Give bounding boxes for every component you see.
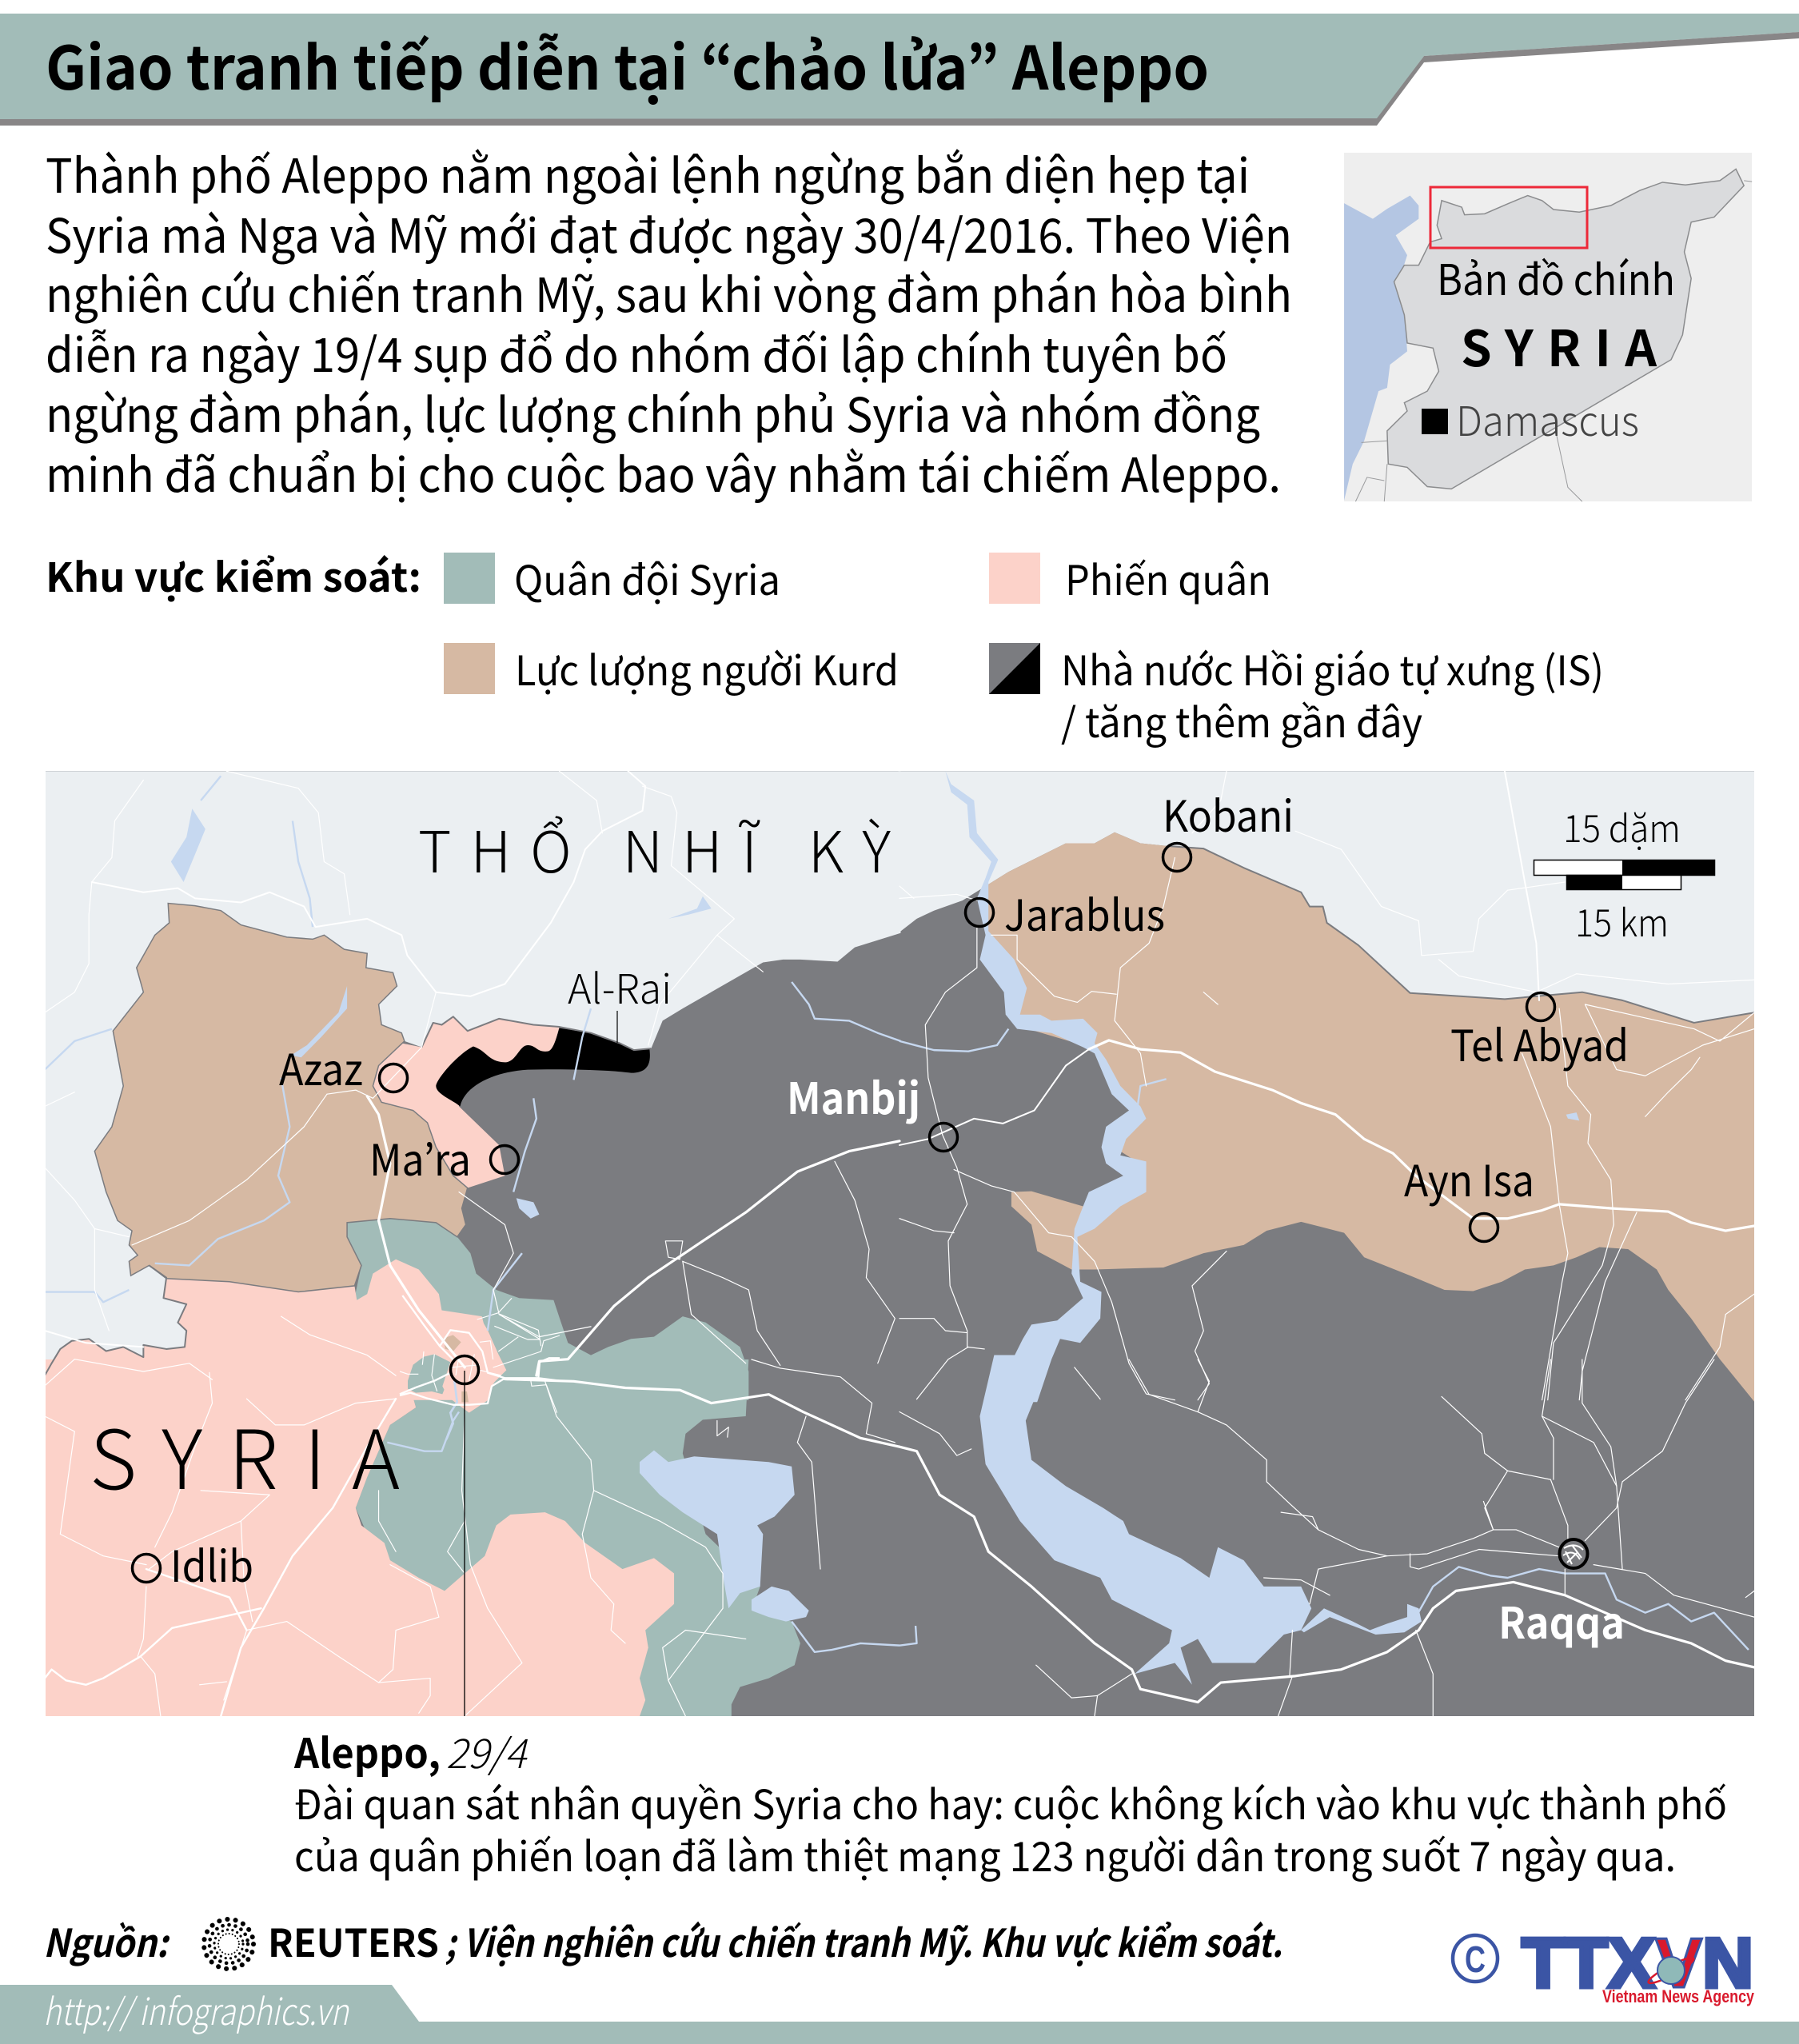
callout: Aleppo note: 29/4 <box>446 1721 529 1780</box>
label: Al-Rai: Al-Rai <box>568 956 672 1016</box>
callout: Aleppo note: Đài quan sát nhân quyền Syria cho hay: cuộc không kích vào khu vực thành phố <box>294 1772 1727 1831</box>
inset label: main map: Bản đồ chính <box>1437 247 1675 308</box>
inset label: Damascus: Damascus <box>1456 389 1639 448</box>
intro text block: minh đã chuẩn bị cho cuộc bao vây nhằm tái chiếm Aleppo. <box>46 437 1281 505</box>
legend item: Syrian army: Quân đội Syria <box>514 548 780 607</box>
inset: Damascus marker <box>1422 409 1448 434</box>
city: Jarablus: Jarablus <box>1004 880 1165 944</box>
header banner <box>0 14 1799 126</box>
icon: copyright mark <box>1453 1935 1498 1982</box>
region: Turkey <box>45 771 1754 1375</box>
legend heading: Khu vực kiểm soát: <box>46 546 421 604</box>
border line: Turkey and Syria <box>45 846 1754 1375</box>
footer URL: http:// infographics.vn <box>43 1983 349 2036</box>
source line <box>43 1912 1282 1969</box>
legend item: Islamic State <box>989 638 1604 749</box>
panel: main control map <box>45 771 1754 1716</box>
scale bar <box>1534 798 1715 948</box>
Al-Rai leader line <box>616 1011 618 1043</box>
source line: REUTERS <box>268 1912 439 1968</box>
callout: Aleppo note <box>293 1721 1727 1883</box>
callout: Aleppo note: của quân phiến loạn đã làm thiệt mạng 123 người dân trong suốt 7 ngày qua. <box>294 1824 1676 1883</box>
panel: inset locator map of Syria <box>1344 153 1752 501</box>
legend item: rebels: Phiến quân <box>1065 548 1271 607</box>
city: Ayn Isa: Ayn Isa <box>1404 1146 1534 1209</box>
logo: TTXVN Vietnam News Agency: Vietnam News Agency <box>1602 1986 1755 2006</box>
region: Aleppo city detail <box>400 1295 560 1439</box>
inset highlight rectangle <box>1430 187 1587 248</box>
city: Azaz: Azaz <box>279 1035 363 1098</box>
Aleppo leader line <box>464 1371 465 1716</box>
icon: Reuters dot logo <box>204 1919 253 1969</box>
source line: ; Viện nghiên cứu chiến tranh Mỹ. Khu vực kiểm soát. <box>445 1912 1282 1968</box>
map labels <box>90 781 1715 1651</box>
city: Tel Abyad: Tel Abyad <box>1450 1011 1629 1074</box>
city: Manbij <box>787 1064 958 1152</box>
city: Kobani: Kobani <box>1163 781 1294 844</box>
city: Raqqa <box>1498 1539 1625 1651</box>
inset label: Syria: SYRIA <box>1461 309 1657 381</box>
city: Manbij: Manbij <box>787 1064 920 1127</box>
city: Idlib: Idlib <box>170 1531 253 1595</box>
intro text block: Thành phố Aleppo nằm ngoài lệnh ngừng bắn diện hẹp tại <box>46 138 1250 206</box>
callout: Aleppo note: Aleppo, <box>293 1721 441 1780</box>
city: Kobani <box>1163 781 1294 872</box>
city: Ma'ra: Ma’ra <box>369 1125 471 1188</box>
city: Idlib <box>133 1531 253 1595</box>
legend item: Islamic State: Nhà nước Hồi giáo tự xưng (IS) <box>1061 638 1604 697</box>
water: Euphrates and lakes <box>45 771 1749 1685</box>
label: Turkey: THỔ NHĨ KỲ <box>418 808 891 889</box>
intro text block <box>46 138 1292 505</box>
intro text block: diễn ra ngày 19/4 sụp đổ do nhóm đối lập chính tuyên bố <box>46 317 1227 385</box>
roads <box>45 771 1754 1716</box>
logo: TTXVN Vietnam News Agency: TTXVN <box>1522 1923 1753 2002</box>
footer band <box>0 1985 1799 2044</box>
intro text block: Syria mà Nga và Mỹ mới đạt được ngày 30/4/2016. Theo Viện <box>46 198 1292 266</box>
region: Syrian army territory <box>148 1219 800 1716</box>
icon: copyright mark: C <box>1465 1938 1486 1980</box>
region: Kurdish territory west <box>94 904 468 1292</box>
city: Raqqa: Raqqa <box>1498 1588 1625 1651</box>
logo globe <box>1646 1954 1696 1986</box>
scale bar: 15 dặm <box>1563 798 1681 853</box>
legend item: Islamic State: / tăng thêm gần đây <box>1061 690 1422 749</box>
city: Ayn Isa <box>1404 1146 1534 1241</box>
title: Giao tranh tiếp diễn tại “chảo lửa” Aleppo <box>46 20 1209 107</box>
intro text block: nghiên cứu chiến tranh Mỹ, sau khi vòng đàm phán hòa bình <box>46 257 1292 325</box>
map base: Islamic State territory <box>46 771 1754 1716</box>
label: Syria: SYRIA <box>90 1395 400 1513</box>
source line: Nguồn: <box>43 1912 170 1968</box>
scale bar: 15 km <box>1575 892 1669 948</box>
city: Aleppo marker <box>451 1356 478 1383</box>
region: Rebel territory <box>45 1016 674 1716</box>
region: Kurdish territory east <box>986 832 1754 1402</box>
region: recent Islamic State gains <box>436 1028 650 1107</box>
intro text block: ngừng đàm phán, lực lượng chính phủ Syria và nhóm đồng <box>46 377 1260 445</box>
legend <box>444 548 1604 749</box>
legend item: Kurdish forces: Lực lượng người Kurd <box>515 638 899 697</box>
